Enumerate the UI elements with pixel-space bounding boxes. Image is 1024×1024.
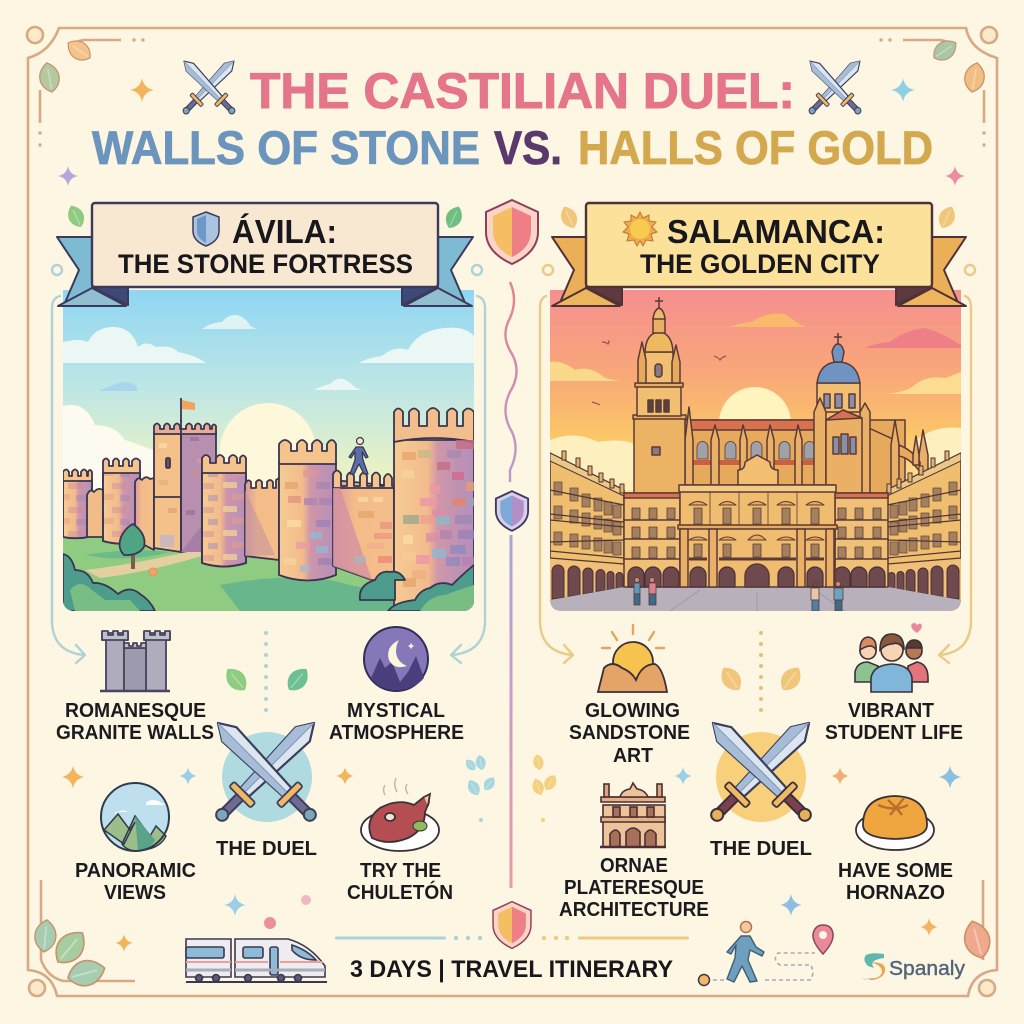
- icon: students: [855, 623, 928, 692]
- sunset sky: [550, 290, 961, 611]
- icon: teal sprig: [463, 754, 498, 822]
- white cloud behind wall: [63, 404, 153, 491]
- wavy line: [505, 282, 517, 482]
- title line 1: THE CASTILIAN DUEL:: [250, 63, 795, 119]
- wall: [245, 478, 279, 560]
- icon: sun over rocks: [598, 625, 667, 692]
- feature: Glowing sandstone art: [569, 625, 690, 767]
- sun: [719, 387, 791, 420]
- ground: [63, 535, 474, 611]
- circle: [716, 732, 806, 822]
- plaza figures: [634, 578, 843, 611]
- logo mark: [862, 953, 885, 980]
- ribbon: [552, 237, 966, 306]
- feature: Mystical atmosphere: ATMOSPHERE: [329, 722, 464, 744]
- feature: Mystical atmosphere: [329, 627, 464, 744]
- vertical line: [510, 535, 512, 888]
- decorations: Ávila side: [62, 633, 498, 952]
- feature: Glowing sandstone art: ART: [613, 745, 653, 767]
- title line 2: stone: WALLS OF STONE: [92, 121, 480, 174]
- feature: Try the chuletón: CHULETÓN: [347, 880, 453, 904]
- feature: Have some hornazo: HORNAZO: [846, 882, 945, 904]
- icon: hornazo bread: [856, 796, 934, 850]
- icon: train: [186, 939, 327, 982]
- central divider: [505, 282, 517, 888]
- clouds: [550, 314, 961, 490]
- plaque: [586, 203, 932, 287]
- banner leaves: [64, 202, 959, 231]
- footer bars: [335, 936, 689, 940]
- icon: blue shield: [193, 212, 219, 246]
- label: VIBRANT: [848, 700, 934, 722]
- sky: [63, 290, 474, 484]
- feature: Try the chuletón: [347, 778, 453, 904]
- icon: centre shield bottom: [493, 902, 531, 948]
- icon: moon: [364, 627, 428, 691]
- central palace: [678, 485, 837, 587]
- tower 6: [279, 440, 336, 580]
- plaque: [92, 203, 438, 287]
- panel: Ávila frame and arrows: [52, 265, 485, 663]
- subheading: THE GOLDEN CITY: [640, 249, 880, 279]
- left bell tower: [633, 297, 686, 495]
- label: ORNAE: [600, 855, 668, 877]
- label: THE DUEL: [216, 838, 317, 860]
- feature: Ornate Plateresque architecture: ARCHITECTURE: [559, 899, 709, 921]
- heading: ÁVILA:: [232, 213, 337, 250]
- circle: [222, 732, 312, 822]
- icon: crossed swords: [207, 712, 325, 830]
- wall: [87, 489, 103, 537]
- feature: Romanesque granite walls: [56, 631, 214, 744]
- duel: Ávila: [207, 712, 325, 860]
- icon: steak plate: [361, 778, 439, 851]
- bushes: [63, 554, 474, 611]
- walker on wall: [349, 438, 368, 474]
- tower 3: [103, 458, 140, 544]
- icon: mountains: [101, 783, 169, 851]
- icon: title swords right: [804, 55, 866, 119]
- header sparkles: [58, 78, 965, 186]
- square tower: [154, 398, 216, 552]
- footer caption: 3 DAYS | TRAVEL ITINERARY: [350, 956, 673, 983]
- feature: Panoramic views: VIEWS: [104, 882, 166, 904]
- wings: [550, 451, 624, 600]
- icon: walker route: [698, 922, 833, 986]
- icon: castle: [100, 631, 170, 691]
- sun: [220, 403, 314, 487]
- title line 2: gold: HALLS OF GOLD: [578, 121, 933, 174]
- duel: Salamanca: [702, 712, 820, 860]
- cathedral nave: [685, 407, 928, 495]
- icon: centre shield top: [486, 200, 538, 264]
- baroque pediment: [738, 455, 778, 485]
- ribbon: [57, 237, 473, 306]
- side sections: [624, 493, 888, 587]
- label: PANORAMIC: [75, 860, 196, 882]
- label: THE DUEL: [710, 838, 812, 860]
- title: [92, 63, 933, 174]
- tower large: [394, 408, 474, 606]
- icon: sun: [623, 212, 657, 246]
- feature: Have some hornazo: [838, 796, 953, 904]
- label: ROMANESQUE: [65, 700, 206, 722]
- tower 5: [202, 455, 246, 566]
- icon: building: [600, 783, 666, 847]
- heading: SALAMANCA:: [667, 213, 885, 250]
- plaza: [550, 587, 961, 611]
- panel: Salamanca frame and arrows: [540, 265, 975, 663]
- tree: [120, 524, 145, 569]
- label: MYSTICAL: [347, 700, 445, 722]
- feature: Ornate Plateresque architecture: [559, 783, 709, 921]
- feature: Panoramic views: [75, 783, 196, 904]
- wall with walker: [333, 470, 394, 580]
- label: TRY THE: [360, 860, 441, 882]
- wall: [135, 477, 154, 550]
- tower far left: [63, 470, 92, 538]
- icon: gold sprig: [530, 753, 559, 822]
- flower: [149, 568, 157, 576]
- icon: centre shield middle: [496, 491, 528, 531]
- right dome: [814, 333, 870, 495]
- feature: Ornate Plateresque architecture: PLATERESQUE: [564, 877, 704, 899]
- label: GLOWING: [585, 700, 680, 722]
- birds: [592, 341, 726, 405]
- feature: Romanesque granite walls: GRANITE WALLS: [56, 722, 214, 744]
- feature: Vibrant student life: [825, 623, 963, 744]
- icon: crossed swords: [702, 712, 820, 830]
- title line 2: versus: VS.: [494, 121, 562, 174]
- feature: Glowing sandstone art: SANDSTONE: [569, 722, 690, 744]
- icon: title swords left: [178, 55, 240, 119]
- banner: Ávila: [57, 203, 473, 306]
- logo: Spanaly: [862, 953, 965, 980]
- subheading: THE STONE FORTRESS: [118, 249, 413, 279]
- clouds: [63, 315, 474, 391]
- illustration: Ávila walls: [63, 290, 474, 611]
- banner: Salamanca: [552, 203, 966, 306]
- decorations: Salamanca side: [530, 633, 962, 936]
- illustration: Salamanca plaza: [550, 290, 961, 611]
- feature: Vibrant student life: STUDENT LIFE: [825, 722, 963, 744]
- label: HAVE SOME: [838, 860, 953, 882]
- path: [85, 552, 201, 578]
- logo wordmark: Spanaly: [889, 958, 965, 980]
